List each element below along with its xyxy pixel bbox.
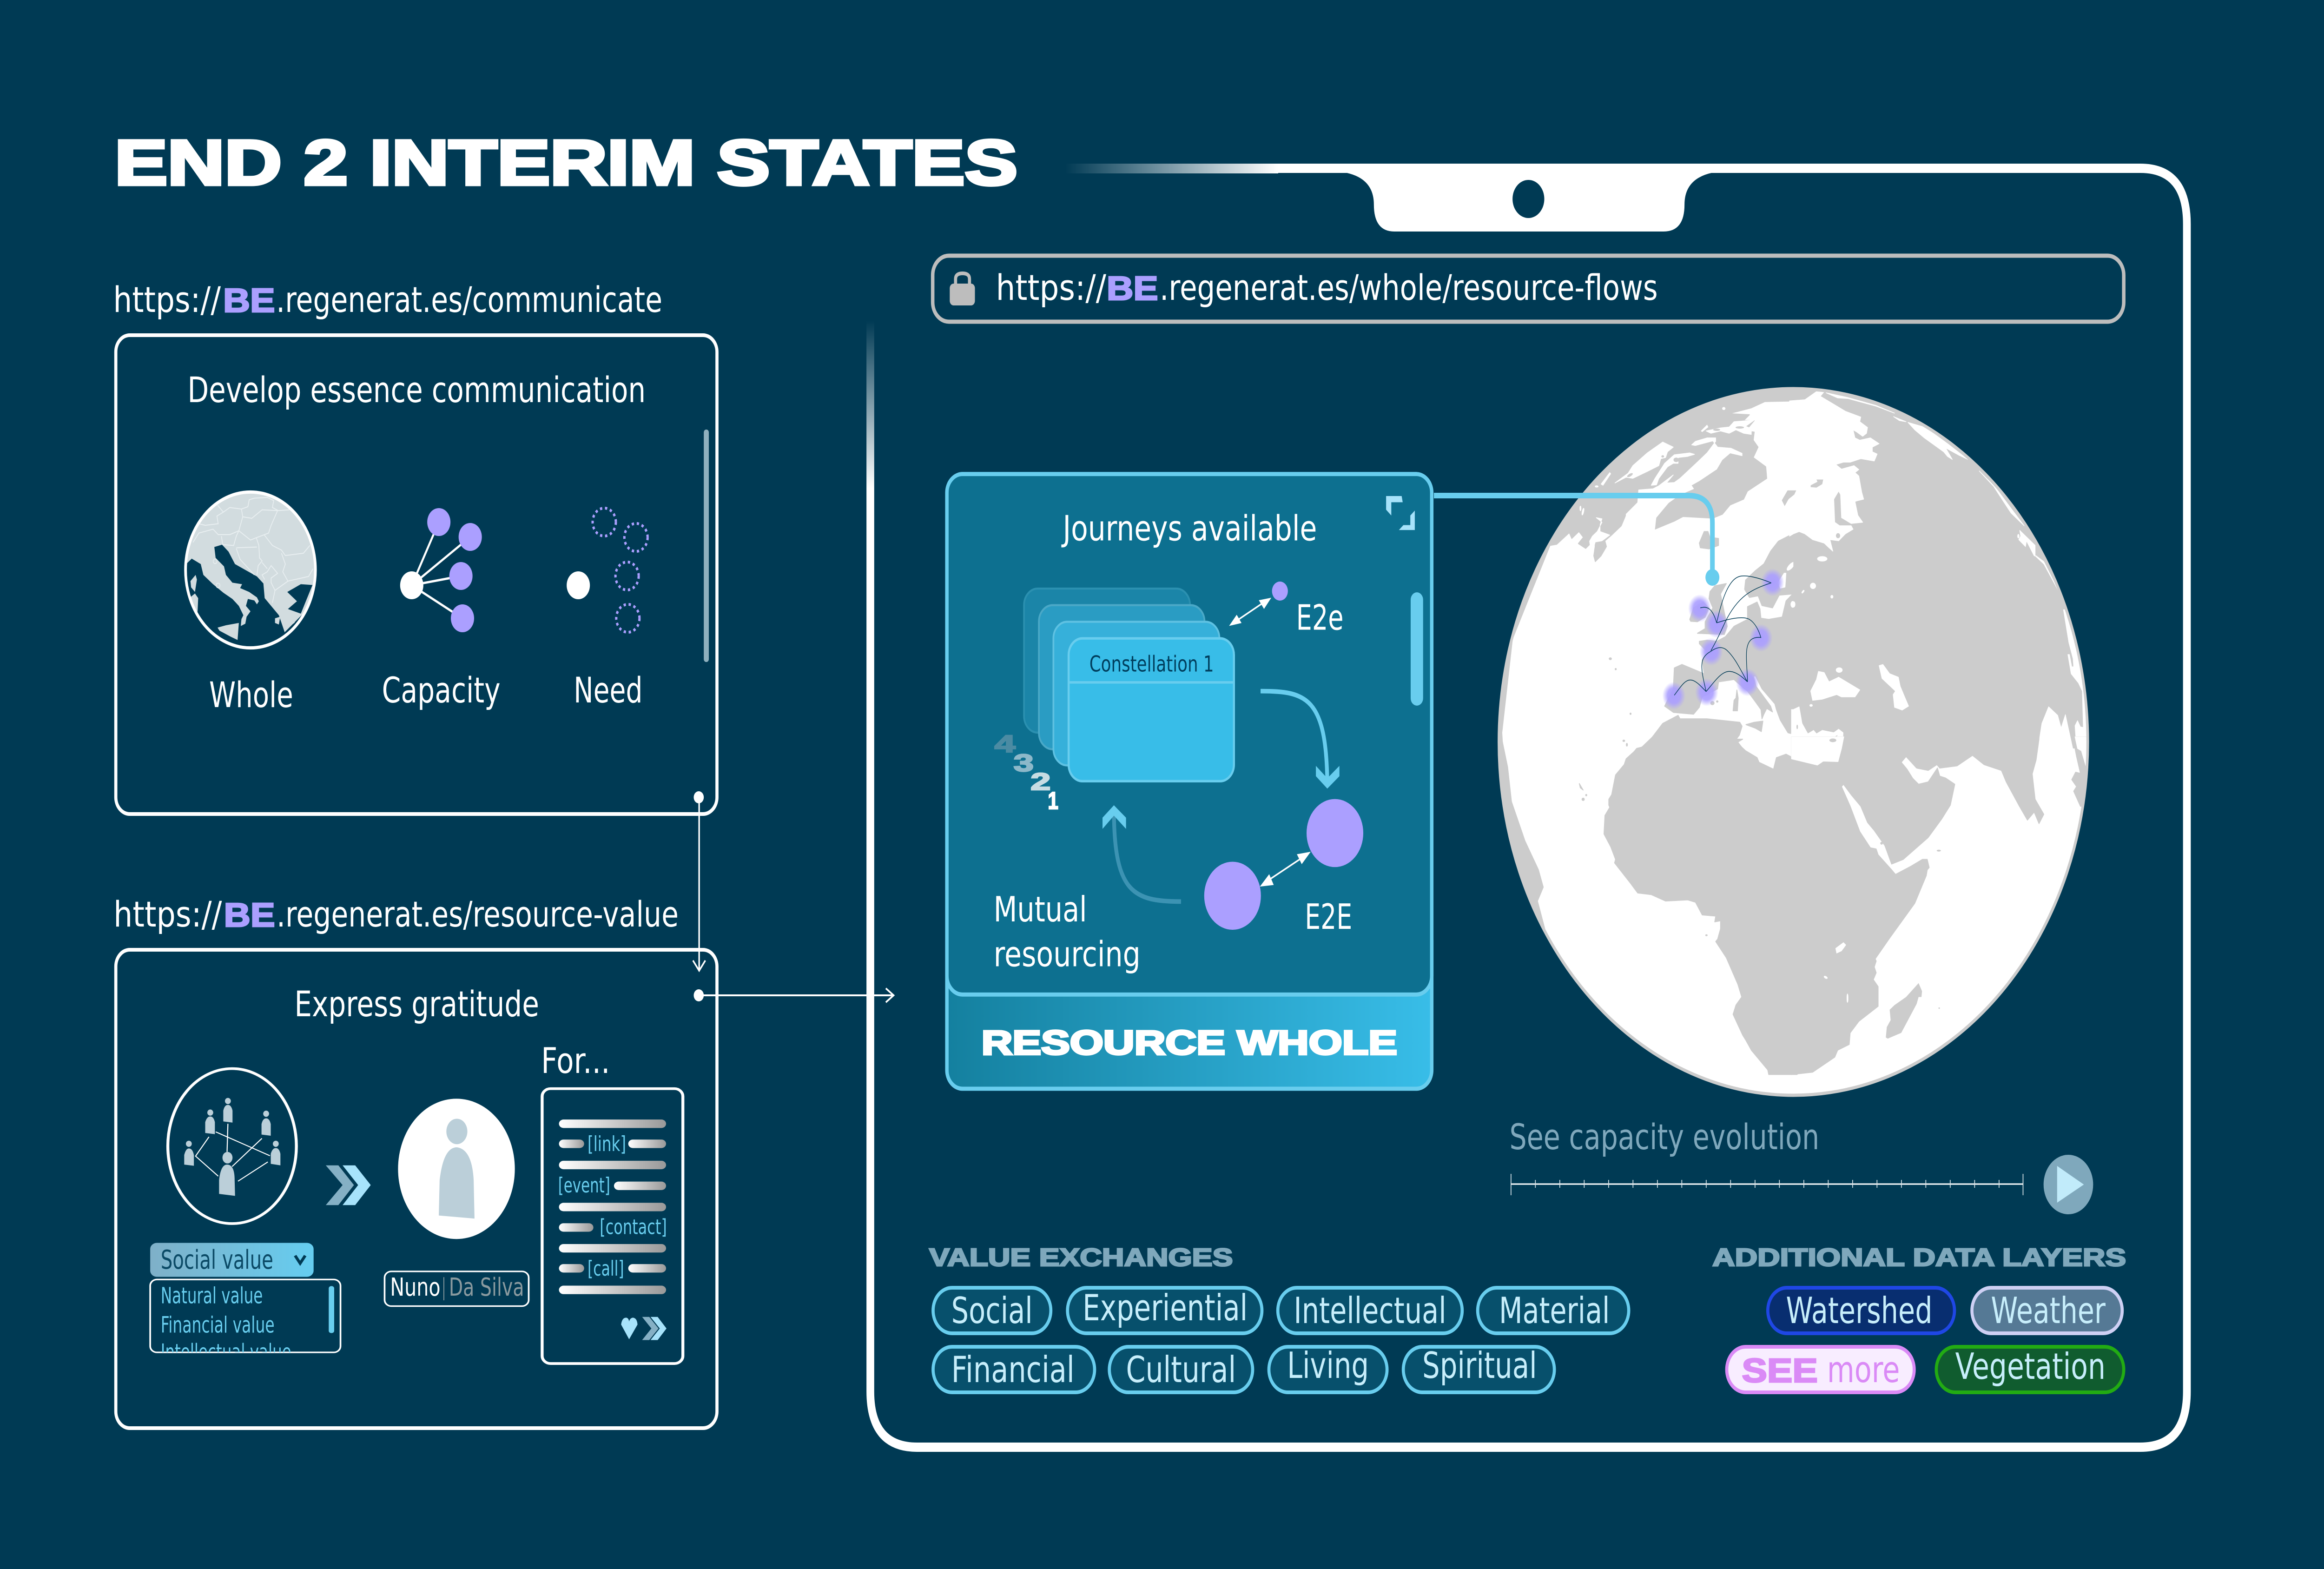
data layer tags: more bbox=[1827, 1348, 1900, 1390]
value exchange tags: Material bbox=[1499, 1289, 1610, 1331]
url: resource value: .regenerat.es/resource-value bbox=[277, 894, 679, 935]
label: mutual resourcing: Mutual bbox=[994, 890, 1087, 930]
timeline slider bbox=[1511, 1174, 2023, 1195]
arrow: back to constellation bbox=[1103, 805, 1181, 901]
stack numbers: 4 bbox=[995, 731, 1016, 758]
dropdown list: Financial value bbox=[161, 1312, 275, 1338]
panel: develop essence communication bbox=[116, 335, 717, 814]
card title: Constellation 1 bbox=[1089, 652, 1214, 677]
label: whole: Whole bbox=[209, 675, 293, 715]
label: mutual resourcing bbox=[994, 890, 1141, 975]
scrollbar bbox=[704, 430, 709, 662]
icon: need nodes bbox=[567, 508, 647, 632]
url: resource value: https:// bbox=[113, 894, 222, 935]
heading: additional data layers: ADDITIONAL DATA LAYERS bbox=[1712, 1243, 2126, 1271]
panel: resource whole bbox=[947, 474, 1432, 1089]
label: for: For... bbox=[541, 1040, 610, 1081]
panel heading: Journeys available bbox=[1061, 509, 1317, 549]
url: resource value bbox=[113, 894, 679, 935]
data layer tags: Weather bbox=[1991, 1289, 2106, 1331]
stack numbers bbox=[995, 731, 1058, 814]
data layer tags bbox=[1727, 1288, 2124, 1392]
stack numbers: 1 bbox=[1048, 788, 1058, 814]
value exchange tags: Spiritual bbox=[1422, 1344, 1537, 1386]
dropdown: social value: Social value bbox=[161, 1244, 273, 1275]
url: resource value: BE bbox=[224, 897, 275, 934]
name field: Da Silva bbox=[449, 1273, 524, 1302]
label: E2e: E2e bbox=[1296, 598, 1344, 638]
url text: .regenerat.es/whole/resource-flows bbox=[1160, 267, 1658, 308]
arrow: panel to panel connector bbox=[693, 791, 706, 971]
card: for list: [call] bbox=[588, 1257, 624, 1281]
panel body bbox=[947, 474, 1432, 994]
footer title: RESOURCE WHOLE bbox=[982, 1024, 1397, 1062]
capacity evolution label: See capacity evolution bbox=[1510, 1117, 1819, 1158]
value exchange tags: Intellectual bbox=[1294, 1289, 1446, 1331]
label: need: Need bbox=[574, 670, 643, 711]
stack numbers: 2 bbox=[1030, 768, 1050, 795]
panel heading: Express gratitude bbox=[294, 984, 539, 1025]
value exchange tags: Living bbox=[1287, 1344, 1369, 1386]
node pair E2E bbox=[1204, 799, 1363, 930]
device camera bbox=[1512, 180, 1544, 218]
constellation card stack bbox=[1024, 589, 1234, 781]
dropdown list: Intellectual value bbox=[161, 1339, 291, 1365]
device frame bbox=[866, 164, 2187, 1447]
value exchange tags: Cultural bbox=[1126, 1348, 1236, 1390]
data layer tags: Vegetation bbox=[1955, 1345, 2106, 1387]
url text: https:// bbox=[996, 267, 1106, 308]
capacity glows and journeys bbox=[1662, 569, 1784, 709]
icon: person avatar bbox=[398, 1099, 515, 1239]
label: capacity: Capacity bbox=[382, 670, 501, 711]
label: mutual resourcing: resourcing bbox=[994, 934, 1141, 975]
panel footer bbox=[947, 921, 1432, 1089]
url: communicate bbox=[113, 279, 662, 320]
card: for list: [link] bbox=[588, 1132, 626, 1157]
callout line from panel to globe bbox=[1434, 496, 1719, 586]
card: for list bbox=[542, 1089, 683, 1364]
icon: lock bbox=[950, 273, 975, 305]
url: communicate: https:// bbox=[113, 279, 221, 320]
dropdown list bbox=[149, 1278, 341, 1353]
device notch bbox=[1333, 171, 1726, 232]
name field: Nuno bbox=[390, 1273, 441, 1302]
panel: express gratitude bbox=[116, 950, 717, 1428]
icon: double chevron bbox=[326, 1165, 371, 1205]
data layer tags: Watershed bbox=[1786, 1289, 1933, 1331]
icon: community circle bbox=[168, 1069, 297, 1224]
value exchange tags: Social bbox=[951, 1289, 1033, 1331]
panel heading: Develop essence communication bbox=[187, 370, 646, 410]
value exchange tags bbox=[933, 1286, 1629, 1392]
icon: whole globe map bbox=[181, 492, 317, 654]
play button bbox=[2044, 1155, 2093, 1214]
icon: expand bbox=[1386, 496, 1415, 530]
stack numbers: 3 bbox=[1014, 750, 1034, 777]
scrollbar bbox=[1411, 592, 1423, 706]
url: communicate: .regenerat.es/communicate bbox=[276, 279, 662, 320]
url bar bbox=[933, 256, 2124, 322]
arrow: panel to browser connector bbox=[693, 988, 893, 1002]
value exchange tags: Experiential bbox=[1083, 1286, 1248, 1329]
card: for list: [contact] bbox=[600, 1215, 667, 1239]
arrow: to E2E bbox=[1261, 691, 1340, 788]
name field bbox=[384, 1271, 528, 1306]
card: for list: [event] bbox=[558, 1174, 610, 1198]
url text: BE bbox=[1107, 270, 1158, 307]
label: E2E: E2E bbox=[1305, 897, 1352, 938]
small node E2e bbox=[1229, 582, 1288, 626]
data layer tags: SEE bbox=[1742, 1352, 1818, 1390]
value exchange tags: Financial bbox=[951, 1348, 1075, 1390]
title: END 2 INTERIM STATES bbox=[115, 127, 1017, 198]
heading: value exchanges: VALUE EXCHANGES bbox=[929, 1243, 1233, 1271]
dropdown list: Natural value bbox=[161, 1283, 263, 1309]
icon: capacity nodes bbox=[400, 508, 482, 632]
url: communicate: BE bbox=[223, 282, 275, 319]
globe map bbox=[1491, 381, 2102, 1097]
